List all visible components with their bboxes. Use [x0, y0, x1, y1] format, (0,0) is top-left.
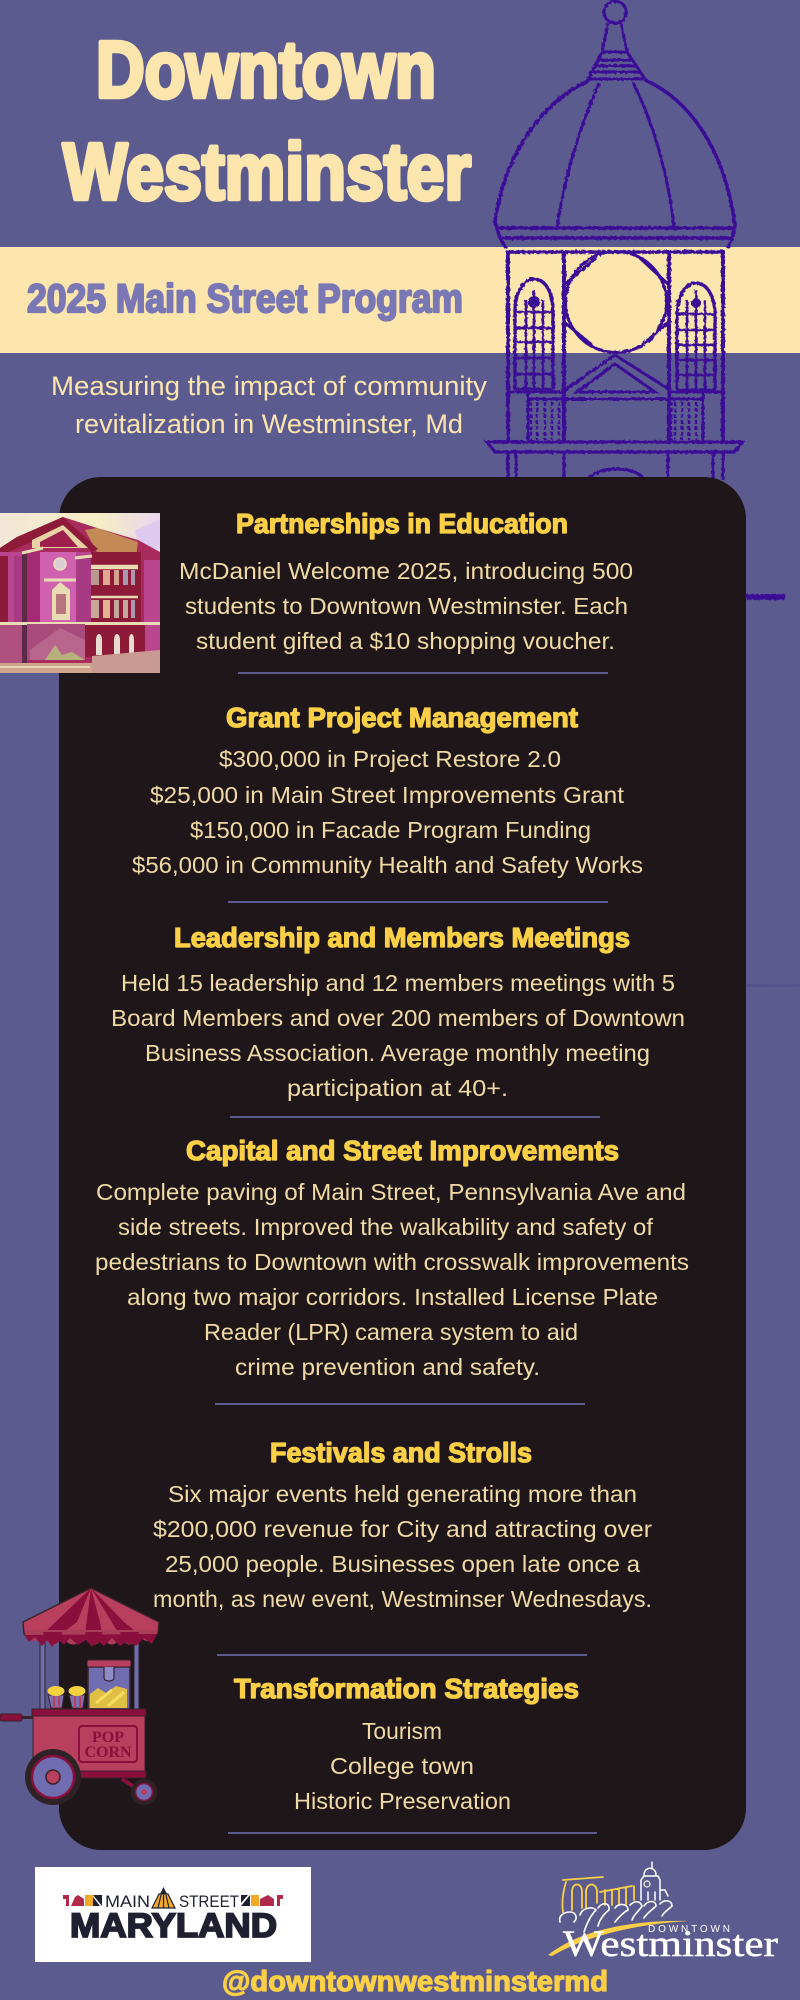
body text: student gifted a $10 shopping voucher.	[196, 628, 615, 654]
heading: Transformation Strategies	[234, 1673, 579, 1704]
heading: Leadership and Members Meetings	[174, 922, 630, 953]
logo: Main Street Maryland: MARYLAND	[70, 1907, 277, 1945]
body text: Complete paving of Main Street, Pennsylvania Ave and	[96, 1179, 686, 1205]
image: historic building illustration	[0, 513, 160, 673]
strategies list: Tourism	[362, 1718, 442, 1744]
grant amounts list: $56,000 in Community Health and Safety Works	[132, 852, 643, 878]
popcorn sign	[79, 1726, 137, 1762]
icon: popcorn cart	[0, 1588, 159, 1805]
body text: participation at 40+.	[287, 1075, 508, 1101]
flag motif left	[63, 1895, 102, 1906]
strategies list: Historic Preservation	[294, 1788, 511, 1814]
panel: dark content card	[59, 477, 746, 1850]
body text	[153, 1481, 652, 1612]
body text: students to Downtown Westminster. Each	[185, 593, 628, 619]
icon: lantern	[152, 1887, 175, 1908]
body text: McDaniel Welcome 2025, introducing 500	[179, 558, 633, 584]
section: partnerships in education	[179, 508, 633, 654]
heading: Grant Project Management	[226, 702, 578, 733]
body text: Board Members and over 200 members of Downtown	[111, 1005, 685, 1031]
section: capital and street improvements	[95, 1135, 689, 1380]
section: festivals and strolls	[153, 1437, 652, 1612]
heading: Festivals and Strolls	[270, 1437, 532, 1468]
skyline illustration	[560, 1862, 672, 1932]
social handle: @downtownwestminstermd	[222, 1966, 608, 1998]
body text: along two major corridors. Installed License Plate	[127, 1284, 658, 1310]
subtitle: revitalization in Westminster, Md	[75, 409, 463, 439]
body text: crime prevention and safety.	[235, 1354, 540, 1380]
banner band	[0, 247, 800, 353]
heading: Capital and Street Improvements	[186, 1135, 619, 1166]
logo: Downtown Westminster: Westminster	[563, 1924, 778, 1965]
body text: Held 15 leadership and 12 members meetings with 5	[121, 970, 675, 996]
grant amounts list	[132, 746, 643, 878]
title: Westminster	[63, 127, 471, 216]
title	[63, 25, 471, 216]
grant amounts list: $150,000 in Facade Program Funding	[190, 817, 591, 843]
popcorn sign: CORN	[84, 1744, 132, 1761]
logo text: DOWNTOWN	[648, 1924, 730, 1935]
subtitle: Measuring the impact of community	[51, 371, 487, 401]
body text	[95, 1179, 689, 1380]
logo: Downtown Westminster	[548, 1862, 778, 1965]
popcorn sign: POP	[92, 1729, 124, 1746]
body text: Reader (LPR) camera system to aid	[204, 1319, 578, 1345]
logo: Main Street Maryland	[35, 1867, 311, 1962]
logo text: MAIN	[105, 1892, 150, 1911]
title: Downtown	[96, 25, 436, 114]
flag motif right	[241, 1895, 283, 1906]
banner heading: 2025 Main Street Program	[27, 277, 463, 321]
body text: 25,000 people. Businesses open late once a	[165, 1551, 640, 1577]
section: leadership and members meetings	[111, 922, 685, 1101]
grant amounts list: $25,000 in Main Street Improvements Grant	[150, 782, 625, 808]
icon: clock tower line drawing	[487, 1, 785, 597]
strategies list	[294, 1718, 511, 1814]
grant amounts list: $300,000 in Project Restore 2.0	[219, 746, 561, 772]
shadow streak	[700, 984, 800, 987]
body text: $200,000 revenue for City and attracting over	[153, 1516, 652, 1542]
body text: Six major events held generating more than	[168, 1481, 637, 1507]
body text: Business Association. Average monthly meeting	[145, 1040, 650, 1066]
logo: Main Street Maryland: STREET	[179, 1892, 239, 1911]
body text	[179, 558, 633, 654]
strategies list: College town	[330, 1753, 474, 1779]
gold swoosh	[548, 1921, 688, 1956]
body text	[111, 970, 685, 1101]
subtitle	[51, 371, 487, 439]
body text: side streets. Improved the walkability and safety of	[118, 1214, 654, 1240]
body text: pedestrians to Downtown with crosswalk improvements	[95, 1249, 689, 1275]
heading: Partnerships in Education	[236, 508, 568, 539]
body text: month, as new event, Westminser Wednesdays.	[153, 1586, 652, 1612]
section: transformation strategies	[234, 1673, 579, 1814]
section: grant project management	[132, 702, 643, 878]
